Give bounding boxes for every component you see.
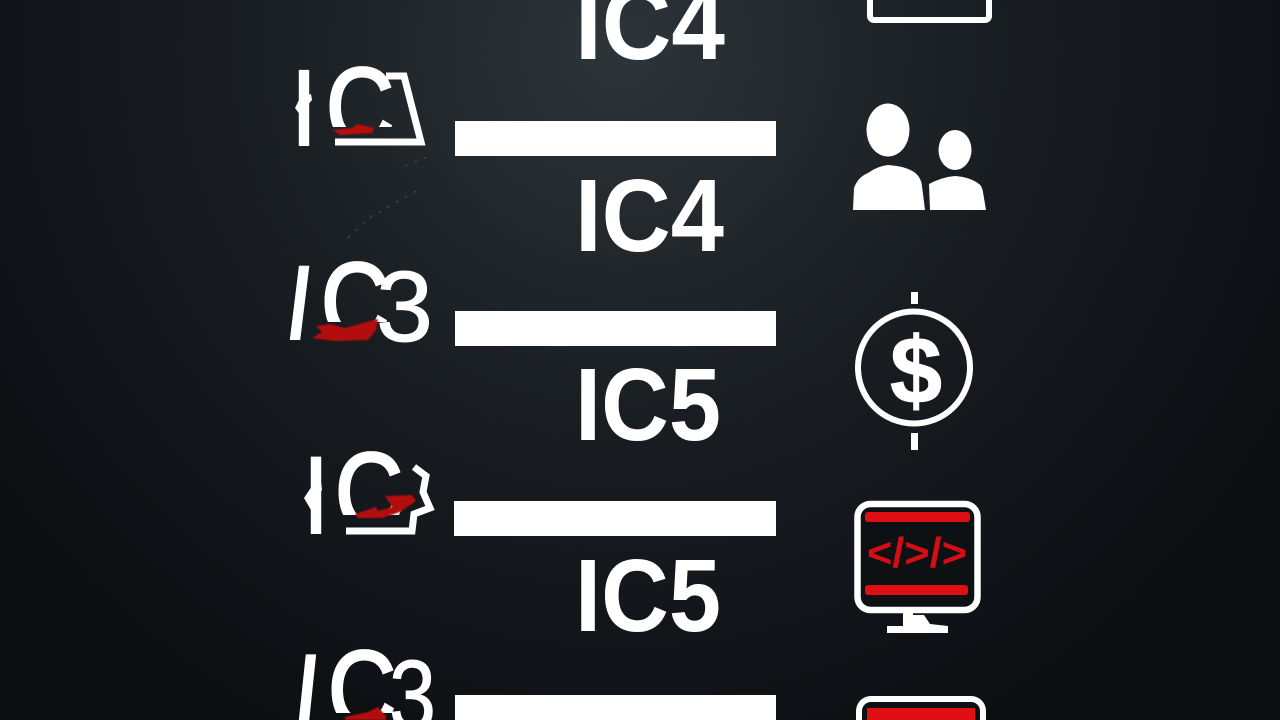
- red smear: [333, 124, 374, 135]
- heading: IC5 third: IC5: [575, 347, 721, 462]
- red smear: [312, 319, 378, 341]
- row 4: garbled label: [304, 451, 435, 534]
- infographic canvas: [116, 0, 1126, 720]
- bar 2: [455, 311, 776, 346]
- icon: people: [853, 104, 986, 210]
- garbled mark: trapezoid: [335, 76, 421, 142]
- wiggle on I: [304, 482, 322, 510]
- bar 4: [455, 695, 776, 720]
- garbled mark: jagged base: [346, 467, 430, 531]
- icon: dollar coin: [858, 292, 970, 450]
- garbled mark: I: I: [294, 47, 314, 170]
- wiggle on I: [295, 94, 312, 116]
- code glyphs: </>/>: [867, 529, 967, 576]
- dollar sign: $: [890, 318, 942, 424]
- heading: IC4 second: IC4: [575, 158, 724, 273]
- row 5: garbled IC3: [298, 649, 433, 720]
- bar 1: [455, 121, 776, 156]
- garbled mark: C: C: [326, 46, 394, 169]
- icon: code monitor: [858, 504, 978, 633]
- row 3: garbled IC3: [290, 261, 429, 342]
- garbled mark: I: I: [306, 433, 326, 558]
- monitor stand: [887, 611, 948, 633]
- red smear: [355, 495, 416, 518]
- garbled mark: 3: 3: [376, 251, 433, 363]
- heading: IC5 fourth: IC5: [575, 538, 721, 653]
- garbled mark: slanted I: I: [282, 242, 317, 363]
- row 1: heading and monitor: [575, 0, 989, 81]
- icon: monitor top: [870, 0, 989, 20]
- garbled mark: C: C: [321, 241, 389, 364]
- row 2: garbled label: [295, 66, 426, 146]
- bar 3: [454, 501, 776, 536]
- garbled mark: C: C: [335, 431, 403, 554]
- red smear: [345, 707, 386, 720]
- icon: code monitor bottom: [859, 699, 983, 720]
